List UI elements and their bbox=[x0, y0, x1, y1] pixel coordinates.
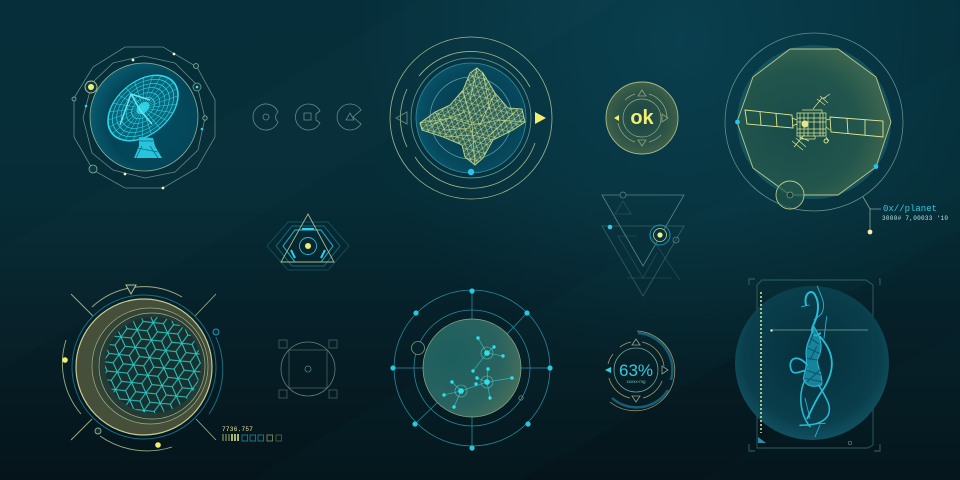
panel: target square bbox=[279, 340, 337, 398]
panel: wireframe mountain bbox=[390, 37, 552, 199]
ok rings bbox=[618, 94, 667, 142]
target circle bbox=[281, 342, 335, 396]
percent value: 63% bbox=[619, 361, 653, 380]
top node bbox=[620, 192, 626, 198]
inner polygon ring bbox=[83, 56, 205, 178]
lower triangle bbox=[602, 226, 684, 296]
open node bbox=[412, 342, 424, 354]
panel: ok button bbox=[606, 82, 678, 154]
satellite outer ring bbox=[725, 33, 903, 211]
blue arcs bbox=[612, 333, 672, 407]
callout sub-label: 3000# 7,00033 '10 bbox=[882, 215, 948, 222]
cyan node bbox=[608, 225, 612, 229]
scan frame bbox=[749, 279, 880, 451]
specimen disc bbox=[735, 286, 889, 440]
sphere rings bbox=[92, 308, 208, 424]
corner squares bbox=[279, 340, 337, 398]
blue dot bbox=[468, 169, 474, 175]
decagon plate bbox=[737, 49, 891, 195]
mountain mesh bbox=[420, 68, 525, 165]
ok arrows bbox=[614, 90, 668, 146]
panel: percentage gauge bbox=[605, 331, 675, 411]
panel: lattice sphere bbox=[62, 285, 282, 451]
percent caption: xxxxx-mg bbox=[626, 379, 646, 384]
network disc bbox=[423, 319, 521, 417]
target node bbox=[650, 225, 679, 245]
ok disc bbox=[606, 82, 678, 154]
lattice globe bbox=[105, 317, 201, 413]
triangle bbox=[281, 214, 334, 262]
panel: node network bbox=[390, 288, 553, 451]
panel: hexagon triangle emblem bbox=[267, 214, 349, 270]
dotted gauge bbox=[760, 292, 762, 433]
corner marker bbox=[758, 437, 766, 443]
core bbox=[300, 238, 316, 254]
ring dots bbox=[735, 120, 740, 124]
cyan bars bbox=[291, 229, 325, 258]
specimen strands bbox=[790, 286, 832, 437]
arrow: right yellow bbox=[535, 112, 546, 124]
panel: radar dish bbox=[72, 47, 215, 189]
dashed ring bbox=[608, 342, 664, 398]
centre point bbox=[305, 366, 311, 372]
upper triangle bbox=[602, 195, 684, 266]
callout leader bbox=[863, 197, 881, 234]
icon: notched circle with circle bbox=[253, 104, 278, 130]
ok label: ok bbox=[630, 107, 655, 129]
inner ring bbox=[614, 348, 658, 392]
satellite disc bbox=[737, 45, 891, 199]
blue arcs bbox=[72, 295, 223, 439]
inner triangles bbox=[615, 201, 680, 280]
dish disc bbox=[90, 63, 198, 171]
callout label: 0x//planet bbox=[883, 204, 937, 214]
arrow: left outline bbox=[396, 112, 407, 124]
status label: 7736.757 bbox=[222, 426, 253, 433]
orbit rings and spokes bbox=[394, 290, 550, 448]
level bars bbox=[223, 434, 282, 441]
panel: helix specimen bbox=[735, 279, 889, 451]
gauge arrows bbox=[605, 339, 668, 402]
panel: triangles bbox=[602, 192, 684, 296]
icon: notched circle with square bbox=[295, 104, 320, 130]
icon: notched circle with triangle bbox=[337, 104, 361, 130]
ring nodes bbox=[72, 53, 207, 189]
outer arcs bbox=[62, 287, 216, 451]
mountain disc bbox=[416, 63, 526, 173]
cream arcs bbox=[610, 331, 675, 411]
panel: satellite bbox=[725, 33, 948, 234]
icon row: small circles bbox=[253, 104, 361, 130]
satellite wireframe bbox=[745, 94, 883, 150]
sphere nodes bbox=[62, 357, 68, 363]
radar dish wireframe bbox=[95, 62, 191, 158]
outer nodes bbox=[390, 288, 553, 451]
nested hexagons bbox=[267, 222, 349, 270]
constellation bbox=[442, 336, 514, 409]
top triangle marker bbox=[126, 285, 136, 294]
scan line bbox=[770, 329, 868, 332]
small inset circle bbox=[776, 181, 804, 209]
sphere disc bbox=[76, 299, 212, 435]
outer rings bbox=[390, 37, 552, 199]
inner square bbox=[289, 350, 327, 388]
outer polygon ring bbox=[74, 47, 215, 188]
